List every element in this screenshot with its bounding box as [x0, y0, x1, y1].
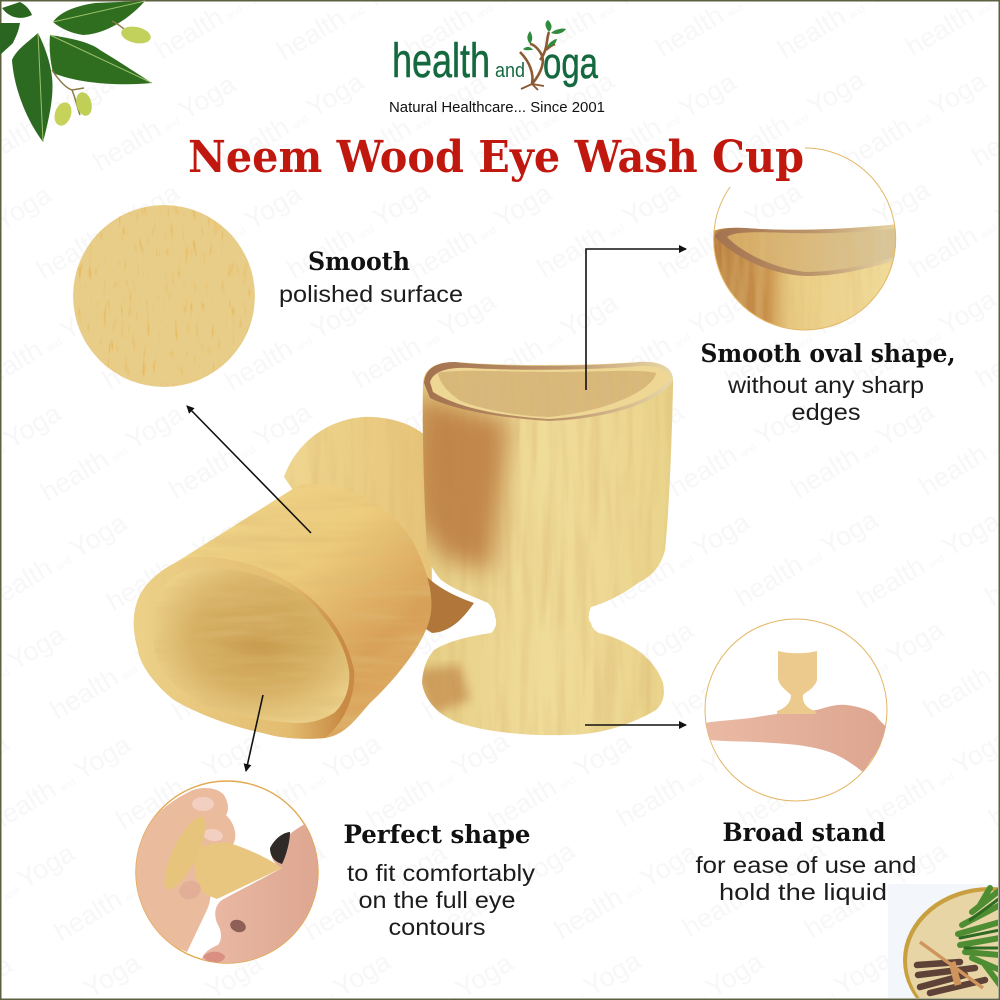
green herbs — [958, 888, 1000, 985]
label: smooth oval shape — [700, 339, 956, 425]
arrow: to eye fit photo — [246, 695, 263, 771]
label: smooth polished surface: polished surface — [279, 281, 463, 307]
logo: health and Yoga — [392, 20, 598, 90]
small cup — [777, 651, 817, 714]
circle photo: smooth wood surface — [73, 205, 255, 387]
face — [202, 824, 318, 963]
dried roots — [917, 962, 985, 993]
hand holding cup — [130, 788, 235, 952]
logo: health and Yoga: oga — [543, 39, 598, 88]
label: perfect shape: to fit comfortably — [347, 860, 536, 886]
photo: herbs on basket — [888, 884, 1000, 1000]
label: smooth polished surface — [279, 247, 463, 307]
tagline: Natural Healthcare... Since 2001 — [389, 100, 605, 116]
photo: two neem wood cups — [134, 362, 673, 739]
label: smooth oval shape: without any sharp — [727, 372, 924, 398]
label: smooth oval shape: edges — [792, 399, 860, 425]
icon: tree in logo — [520, 20, 566, 90]
label: perfect shape: on the full eye — [358, 887, 516, 913]
label: perfect shape: Perfect shape — [344, 820, 530, 849]
arrow: to rim close-up — [586, 249, 686, 390]
basket — [903, 887, 1000, 1000]
label: broad stand: Broad stand — [722, 818, 886, 847]
label: perfect shape: contours — [388, 914, 486, 940]
label: broad stand: for ease of use and — [696, 852, 916, 878]
icon: neem leaves and fruit — [0, 1, 152, 142]
label: perfect shape — [344, 820, 536, 940]
cup upright — [415, 362, 673, 735]
cup held to the eye — [192, 843, 282, 899]
logo: health and Yoga: and — [495, 60, 525, 82]
label: smooth polished surface: Smooth — [308, 247, 410, 276]
arrow: to surface detail — [187, 406, 311, 533]
arrow: to hand photo — [585, 724, 686, 726]
cup lying: back foot — [284, 417, 474, 633]
circle photo: cup rim close-up — [713, 148, 896, 330]
logo: health and Yoga: health — [392, 35, 490, 88]
circle photo: cup against the eye — [135, 780, 319, 964]
cup lying: body — [134, 484, 431, 739]
circle photo: cup on palm — [705, 619, 890, 801]
title: Neem Wood Eye Wash Cup — [188, 132, 804, 183]
tie — [920, 942, 983, 988]
label: broad stand: hold the liquid — [719, 879, 887, 905]
cup lying: rim — [134, 557, 354, 739]
label: broad stand — [696, 818, 916, 905]
label: smooth oval shape: Smooth oval shape, — [700, 339, 956, 368]
hand — [705, 705, 890, 772]
